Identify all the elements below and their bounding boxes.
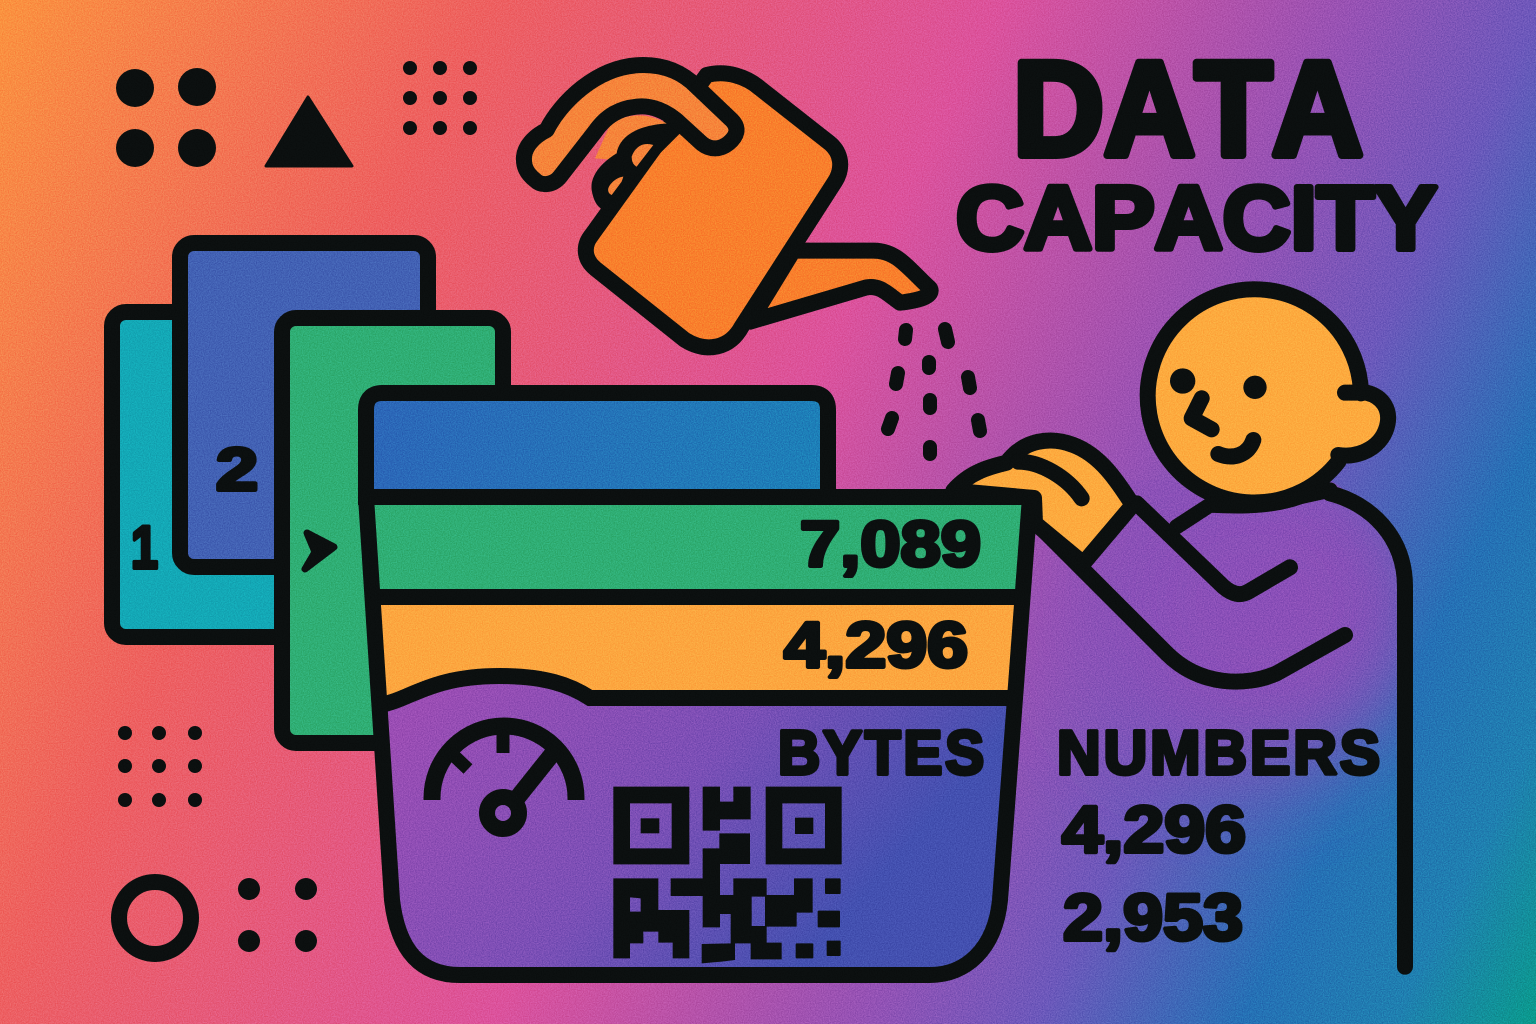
handle [524, 65, 736, 184]
decor: small dot grid left [118, 726, 202, 807]
QR code [613, 787, 842, 963]
nose [1192, 398, 1212, 429]
value 4,296: 4,296 [1062, 792, 1246, 866]
chevron on card 3 [305, 533, 334, 569]
value 4,296: 4,296 [784, 609, 968, 681]
green row [366, 497, 1030, 598]
value 2,953: 2,953 [1063, 880, 1243, 954]
card 3 green [282, 318, 503, 743]
watering can [524, 65, 931, 347]
water drops [888, 329, 980, 454]
title [956, 35, 1437, 269]
decor: four medium dots [238, 878, 317, 952]
hand crescent [595, 115, 673, 160]
decor: four large dots [116, 68, 216, 167]
fingers [591, 123, 680, 210]
basket outline [366, 497, 1030, 975]
orange row [374, 597, 1022, 705]
card number 2: 2 [216, 436, 258, 503]
decor: ring [119, 882, 191, 954]
card 1 teal [112, 312, 352, 637]
eyes [1170, 368, 1267, 399]
hand [953, 441, 1133, 563]
card number 1: 1 [131, 514, 158, 581]
finger gaps [608, 144, 653, 195]
finger divider [1018, 462, 1082, 498]
decor: small dot grid top [403, 61, 477, 135]
smile [1218, 440, 1253, 456]
title line DATA: DATA [1013, 35, 1363, 184]
label NUMBERS: NUMBERS [1057, 719, 1383, 788]
spout [750, 251, 931, 322]
title line CAPACITY: CAPACITY [956, 169, 1437, 269]
numbers column [1057, 719, 1383, 954]
decor: triangle [266, 97, 352, 166]
head and ear outline [1148, 289, 1388, 503]
value 7,089: 7,089 [800, 508, 981, 580]
lower arm line [1040, 527, 1345, 682]
upper arm line [1137, 503, 1290, 594]
row dividers [374, 597, 1022, 705]
can body [586, 73, 840, 347]
ear [1338, 393, 1388, 456]
label BYTES: BYTES [778, 719, 987, 788]
collar [1177, 490, 1330, 527]
basket purple section [366, 497, 1030, 975]
basket [366, 497, 1030, 975]
gauge icon [432, 726, 576, 829]
shoulder line [1330, 493, 1405, 967]
head [1148, 288, 1362, 502]
blue folder top [366, 393, 828, 497]
torso tint [1128, 481, 1397, 826]
person [953, 288, 1405, 967]
card 2 blue [180, 243, 428, 567]
